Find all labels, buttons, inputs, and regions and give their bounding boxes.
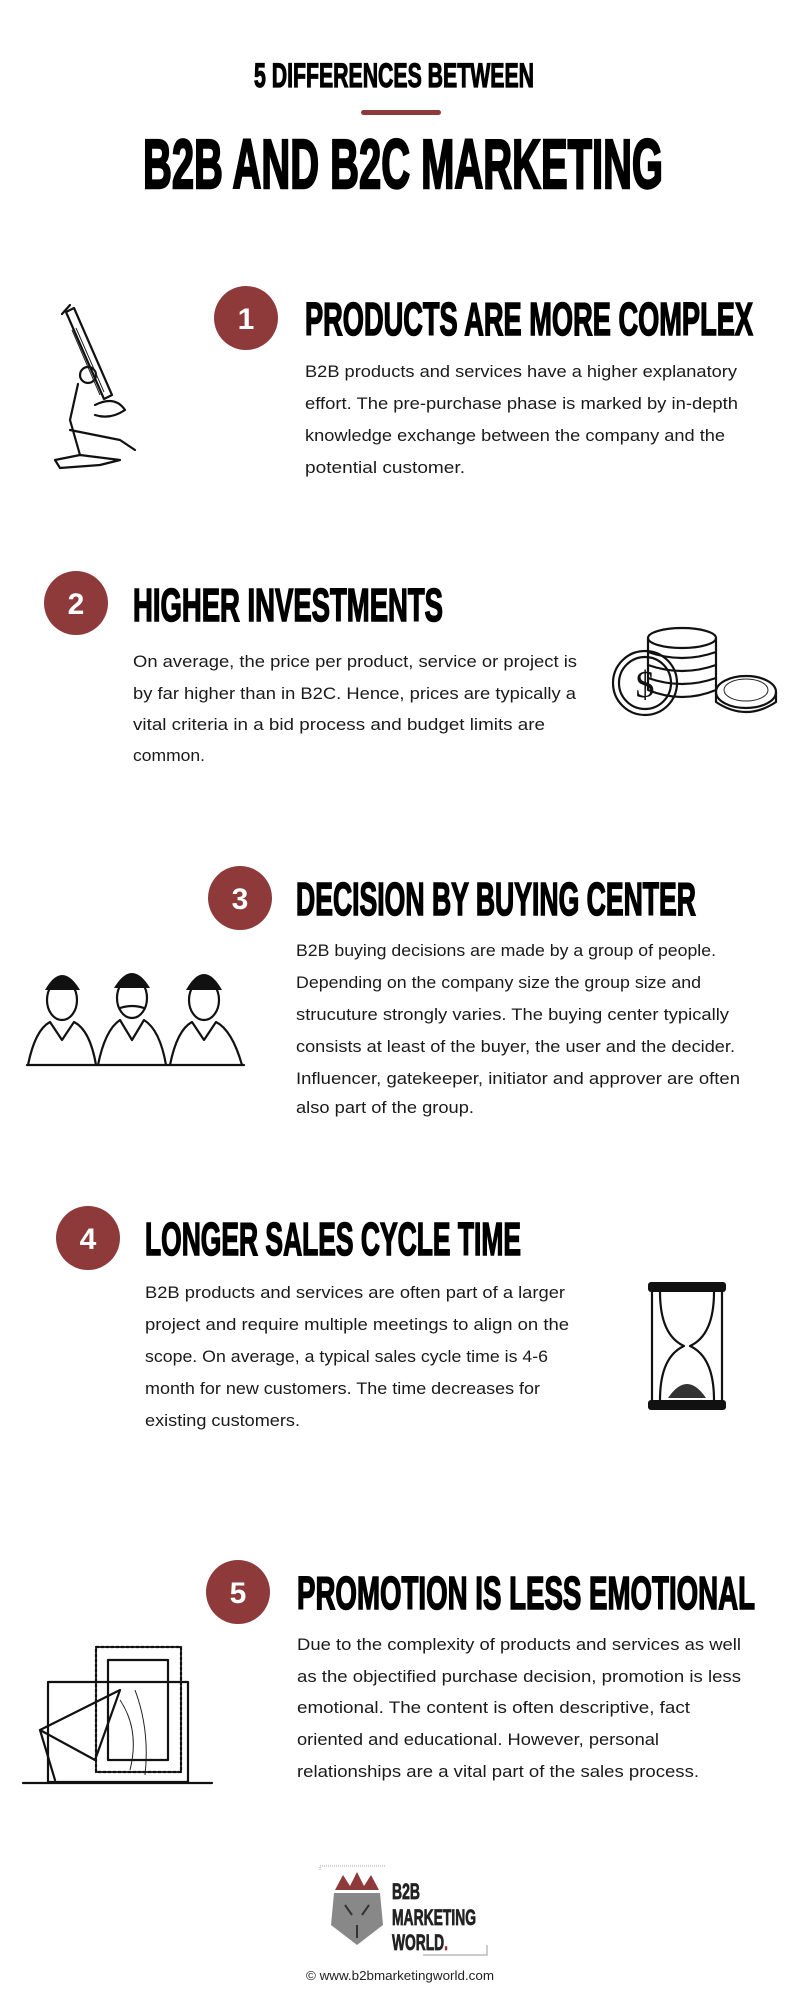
icon: coins: $ — [636, 664, 654, 706]
body 3 — [296, 941, 740, 1117]
body 1: knowledge exchange between the company and the — [305, 426, 725, 445]
body 5: emotional. The content is often descriptive, fact — [297, 1698, 690, 1717]
badge 5 — [206, 1560, 270, 1624]
icon: three men — [27, 973, 244, 1065]
body 1: effort. The pre-purchase phase is marked by in-depth — [305, 394, 738, 413]
panel: section 3 — [27, 866, 740, 1117]
body 3: strucuture strongly varies. The buying center typically — [296, 1005, 730, 1024]
body 4: project and require multiple meetings to align on the — [145, 1315, 569, 1334]
body 4: scope. On average, a typical sales cycle time is 4-6 — [145, 1347, 548, 1366]
icon: hourglass — [648, 1282, 726, 1410]
body 2 — [133, 652, 577, 765]
body 4: month for new customers. The time decreases for — [145, 1379, 540, 1398]
body 3: B2B buying decisions are made by a group of people. — [296, 941, 716, 960]
body 5: oriented and educational. However, personal — [297, 1730, 659, 1749]
body 5: Due to the complexity of products and services as well — [297, 1635, 741, 1654]
logo text: MARKETING — [392, 1905, 476, 1930]
body 2: vital criteria in a bid process and budget limits are — [133, 715, 545, 734]
accent bar — [361, 110, 441, 115]
body 4: B2B products and services are often part of a larger — [145, 1283, 565, 1302]
icon: microscope — [55, 305, 135, 468]
badge 1 — [214, 286, 278, 350]
body 3: Influencer, gatekeeper, initiator and approver are often — [296, 1069, 740, 1088]
logo text — [392, 1879, 476, 1955]
panel: section 1 — [55, 286, 753, 477]
body 2: by far higher than in B2C. Hence, prices are typically a — [133, 684, 577, 703]
icon: wolf — [331, 1872, 383, 1945]
panel: section 2 — [44, 571, 776, 765]
badge 3 — [208, 866, 272, 930]
body 1: potential customer. — [305, 458, 465, 477]
body 3: also part of the group. — [296, 1098, 474, 1117]
body 2: common. — [133, 746, 205, 765]
body 5 — [297, 1635, 741, 1781]
badge 4 — [56, 1206, 120, 1270]
logo — [320, 1866, 487, 1955]
logo text: B2B — [392, 1879, 420, 1904]
icon: envelope and stamp — [23, 1647, 212, 1783]
panel: section 5 — [23, 1560, 755, 1783]
badge 1: 1 — [238, 303, 254, 336]
heading 4: LONGER SALES CYCLE TIME — [145, 1213, 521, 1265]
body 3: consists at least of the buyer, the user and the decider. — [296, 1037, 735, 1056]
heading 2: HIGHER INVESTMENTS — [133, 579, 443, 631]
body 1: B2B products and services have a higher explanatory — [305, 362, 738, 381]
body 4: existing customers. — [145, 1411, 300, 1430]
body 4 — [145, 1283, 569, 1430]
badge 2: 2 — [68, 588, 84, 621]
badge 4: 4 — [80, 1223, 97, 1256]
badge 5: 5 — [230, 1577, 246, 1610]
body 5: relationships are a vital part of the sales process. — [297, 1762, 699, 1781]
body 2: On average, the price per product, service or project is — [133, 652, 577, 671]
body 3: Depending on the company size the group size and — [296, 973, 701, 992]
panel: section 4 — [56, 1206, 726, 1430]
body 1 — [305, 362, 738, 477]
logo text: WORLD. — [392, 1930, 448, 1955]
footer url: © www.b2bmarketingworld.com — [306, 1968, 494, 1983]
body 5: as the objectified purchase decision, promotion is less — [297, 1667, 741, 1686]
badge 3: 3 — [232, 883, 248, 916]
badge 2 — [44, 571, 108, 635]
icon: coins — [613, 628, 776, 715]
subtitle: 5 DIFFERENCES BETWEEN — [254, 57, 534, 95]
